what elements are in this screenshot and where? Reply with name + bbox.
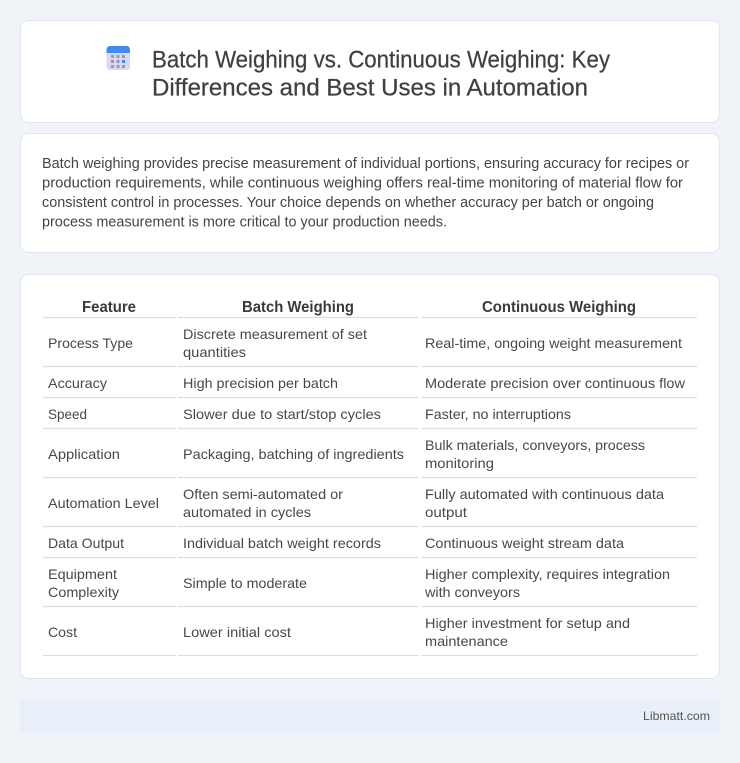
row: data output: Individual batch weight records	[183, 535, 381, 551]
row: automation level: Fully automated with continuous data	[425, 486, 664, 502]
row: process type: Discrete measurement of set	[183, 326, 367, 342]
row: process type: quantities	[183, 344, 246, 360]
row: accuracy: High precision per batch	[183, 375, 338, 391]
footer: Libmatt.com	[643, 709, 710, 723]
footer	[20, 699, 720, 733]
row: application: Application	[48, 446, 120, 462]
row: accuracy: Moderate precision over continuous flow	[425, 375, 686, 391]
row: application	[48, 437, 645, 471]
row: cost: maintenance	[425, 633, 508, 649]
table header: Feature	[82, 299, 136, 316]
row: application: Bulk materials, conveyors, process	[425, 437, 645, 453]
icon: calendar grid	[106, 46, 130, 70]
row: accuracy	[48, 375, 686, 391]
row: automation level: Often semi-automated or	[183, 486, 343, 502]
row: equipment complexity	[48, 566, 670, 600]
row: data output: Data Output	[48, 535, 124, 551]
row: cost: Higher investment for setup and	[425, 615, 630, 631]
title	[152, 46, 610, 102]
table header	[82, 299, 636, 316]
row: cost: Cost	[48, 624, 77, 640]
row: speed: Slower due to start/stop cycles	[183, 406, 381, 422]
row: speed	[48, 406, 571, 422]
row: automation level	[48, 486, 664, 520]
row: equipment complexity: Higher complexity, requires integration	[425, 566, 670, 582]
title: Batch Weighing vs. Continuous Weighing: Key	[152, 46, 610, 74]
table header: Batch Weighing	[242, 299, 354, 316]
row: automation level: automated in cycles	[183, 504, 311, 520]
row: process type: Real-time, ongoing weight measurement	[425, 335, 682, 351]
panel: intro text: production requirements, while continuous weighing offers real-time monitoring of material flow for	[42, 176, 683, 192]
row: cost: Lower initial cost	[183, 624, 291, 640]
row: cost	[48, 615, 630, 649]
row: equipment complexity: Equipment	[48, 566, 117, 582]
row: speed: Faster, no interruptions	[425, 406, 571, 422]
row: automation level: Automation Level	[48, 495, 159, 511]
row: process type	[48, 326, 682, 360]
row: process type: Process Type	[48, 335, 133, 351]
row: data output: Continuous weight stream data	[425, 535, 624, 551]
row: application: Packaging, batching of ingredients	[183, 446, 404, 462]
row: equipment complexity: with conveyors	[424, 584, 520, 600]
row: accuracy: Accuracy	[48, 375, 107, 391]
panel: intro text: process measurement is more critical to your production needs.	[42, 214, 447, 230]
panel: title card	[20, 20, 720, 122]
row: application: monitoring	[425, 455, 494, 471]
panel: intro text: consistent control in processes. Your choice depends on whether accuracy per batch or ongoing	[42, 195, 654, 211]
row: automation level: output	[425, 504, 467, 520]
row: data output	[48, 535, 624, 551]
panel: intro text: Batch weighing provides precise measurement of individual portions, ensuring accuracy for recipes or	[42, 156, 689, 172]
row: equipment complexity: Simple to moderate	[183, 575, 307, 591]
panel: intro text	[20, 134, 720, 252]
row: speed: Speed	[48, 406, 87, 422]
panel: comparison table	[20, 274, 720, 678]
row: equipment complexity: Complexity	[48, 584, 119, 600]
table header: Continuous Weighing	[482, 299, 636, 316]
title: Differences and Best Uses in Automation	[152, 74, 588, 102]
